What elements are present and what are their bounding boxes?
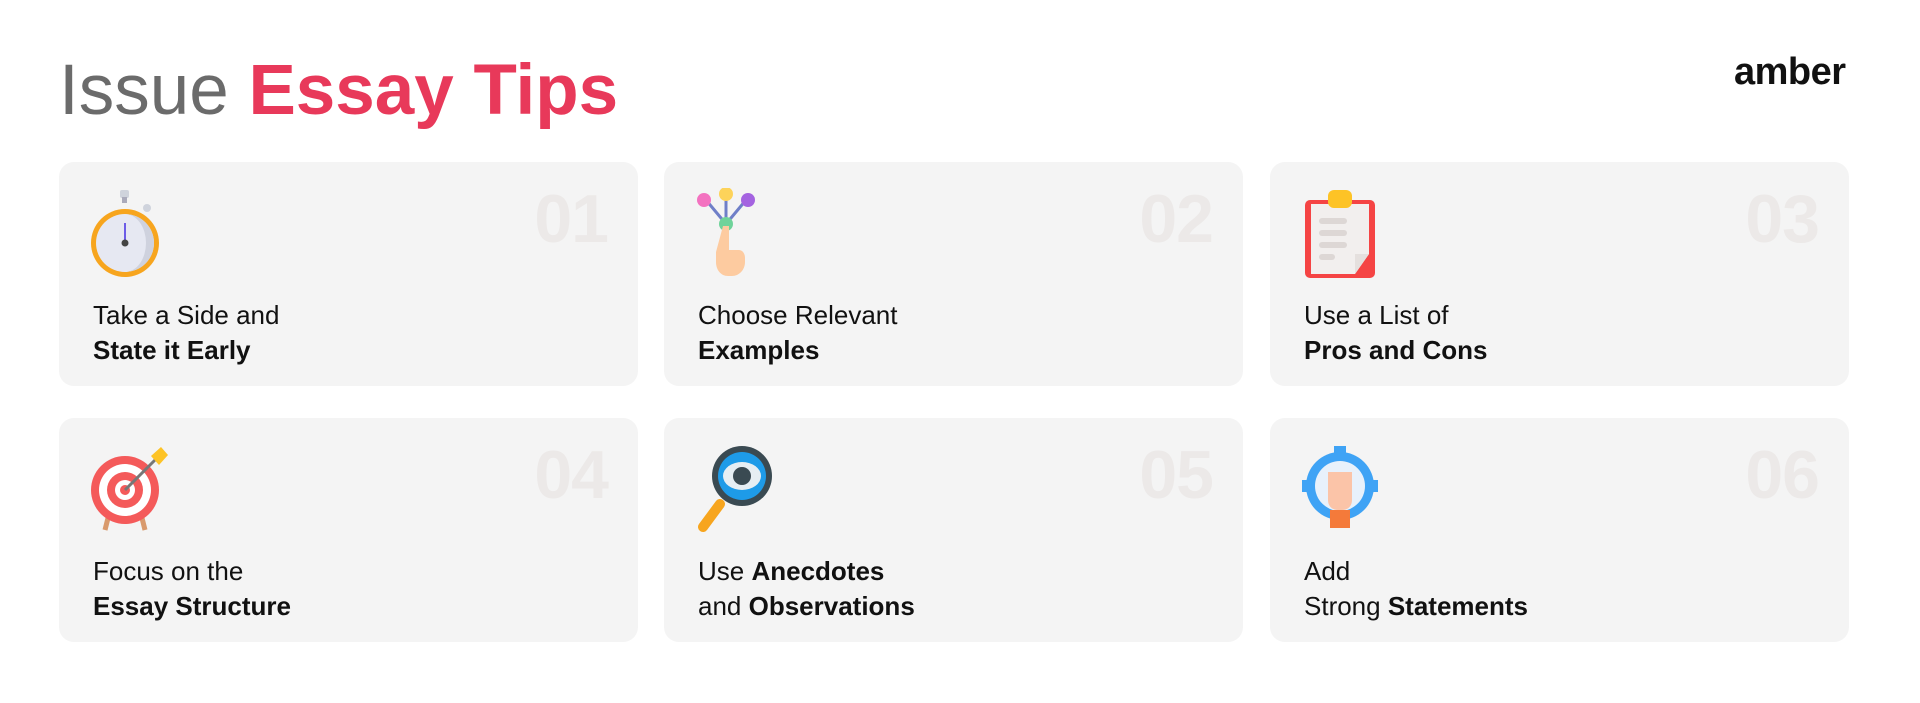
number 04: 04 (534, 437, 608, 513)
number 02: 02 (1139, 181, 1213, 257)
text: Focus on the (93, 556, 243, 586)
text: Strong Statements (1304, 591, 1528, 621)
text (698, 556, 915, 621)
panel: 06 (1270, 418, 1849, 642)
text: Choose Relevant (698, 300, 897, 330)
text: and Observations (698, 591, 915, 621)
text: Use a List of (1304, 300, 1449, 330)
text (93, 300, 279, 365)
panel: 04 (59, 418, 638, 642)
panel: 05 (664, 418, 1243, 642)
text: Essay Structure (93, 591, 291, 621)
panel: 01 (59, 162, 638, 386)
icon: target (91, 447, 168, 531)
text: Pros and Cons (1304, 335, 1487, 365)
number 01: 01 (534, 181, 608, 257)
text (698, 300, 898, 365)
icon: stopwatch (91, 190, 159, 277)
text (1304, 556, 1528, 621)
icon: clipboard (1305, 190, 1375, 278)
text: Use Anecdotes (698, 556, 884, 586)
number 06: 06 (1745, 437, 1819, 513)
icon: gear fist (1302, 446, 1378, 528)
text (1304, 300, 1487, 365)
icon: network hand (697, 188, 755, 276)
logo: amber: amber (1734, 51, 1846, 93)
panel: 03 (1270, 162, 1849, 386)
icon: magnifier eye (698, 446, 772, 532)
panel: 02 (664, 162, 1243, 386)
title: Issue Essay Tips (59, 51, 618, 130)
text: Add (1304, 556, 1350, 586)
text: Take a Side and (93, 300, 279, 330)
text (93, 556, 291, 621)
text: Examples (698, 335, 819, 365)
text: State it Early (93, 335, 251, 365)
number 05: 05 (1139, 437, 1213, 513)
number 03: 03 (1745, 181, 1819, 257)
